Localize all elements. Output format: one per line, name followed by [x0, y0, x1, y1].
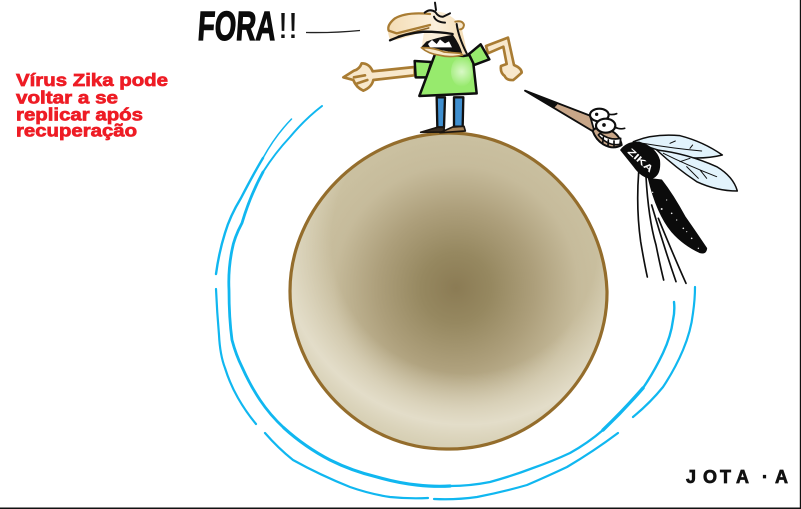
mosquito: abdomen	[648, 178, 707, 253]
mosquito: thorax with label	[620, 142, 660, 179]
mosquito: wings	[633, 135, 737, 191]
man: shoes	[421, 126, 465, 133]
mosquito: legs	[638, 172, 686, 283]
mosquito: proboscis	[525, 91, 595, 132]
headline text: Vírus Zika pode	[16, 70, 168, 90]
mosquito: head and eyes	[590, 109, 625, 147]
man: legs	[437, 97, 463, 127]
blue orbit rings	[216, 106, 695, 499]
speech text: FORA!!: FORA	[196, 3, 278, 49]
mosquito	[525, 91, 737, 283]
speech text: FORA!!: !!	[278, 5, 298, 46]
headline text: voltar a se	[16, 88, 118, 108]
man: right arm and hand	[486, 38, 522, 80]
man shouting	[343, 3, 522, 133]
man: head	[388, 3, 467, 57]
man: left arm and hand	[343, 63, 415, 91]
artist signature: JOTA · A	[686, 467, 788, 487]
man: green shirt	[415, 44, 489, 96]
planet sphere	[290, 133, 607, 449]
headline text: replicar após	[16, 104, 143, 124]
headline text: recuperação	[16, 120, 137, 140]
mosquito: thorax with label: ZIKA	[626, 146, 655, 175]
